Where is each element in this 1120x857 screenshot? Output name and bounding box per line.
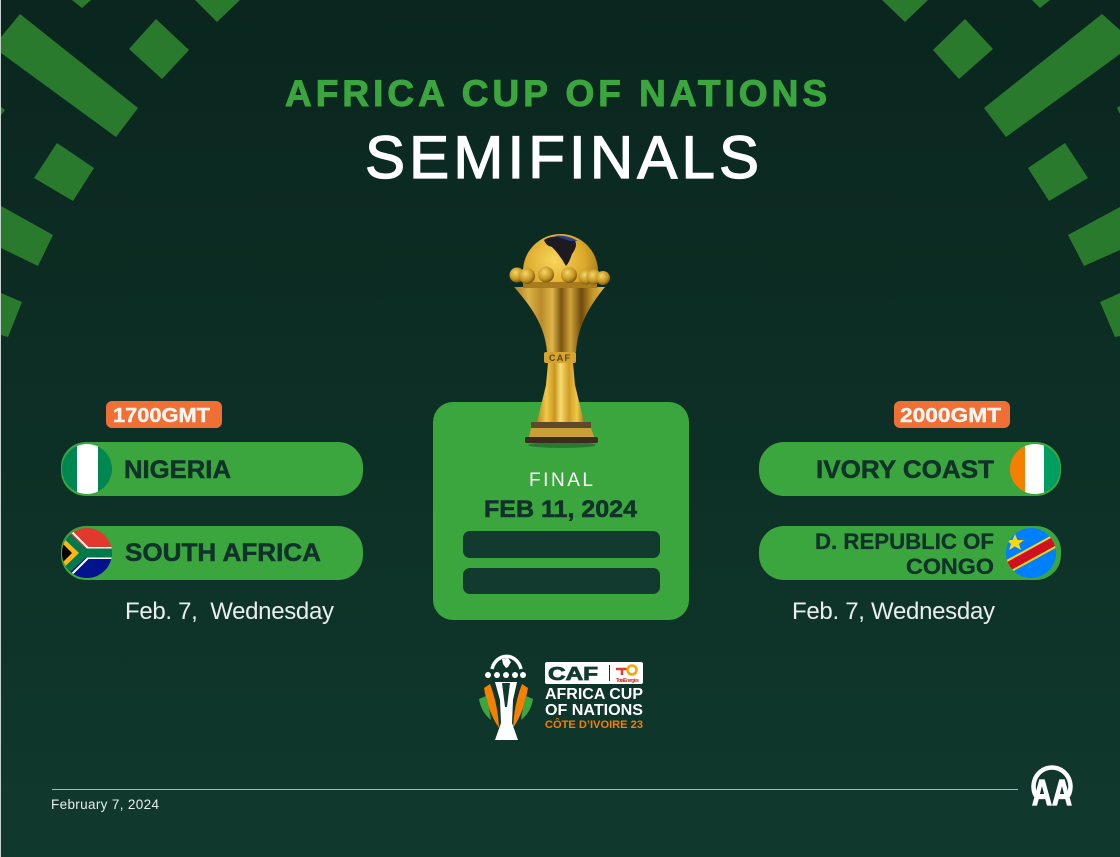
logo: cup emblem (479, 656, 533, 740)
time badge: 2000GMT (894, 401, 1010, 428)
panel: final (433, 402, 689, 620)
time badge: 1700GMT: 1700GMT (113, 405, 210, 427)
logo: CAF badge: TotalEnergies (616, 678, 639, 684)
team row: DR Congo (759, 526, 1061, 580)
match date: left: Feb. 7, Wednesday (125, 598, 334, 625)
finalist slot 1 (463, 531, 660, 558)
icon: trophy (510, 234, 610, 448)
time badge: 2000GMT: 2000GMT (900, 405, 1001, 427)
footer rule (52, 789, 1018, 790)
title (285, 73, 827, 191)
team row: DR Congo: D. REPUBLIC OF (815, 529, 994, 554)
heading: semifinals: SEMIFINALS (365, 124, 759, 191)
icon: trophy: CAF (549, 353, 570, 363)
logo: host line: CÔTE D’IVOIRE 23 (545, 718, 643, 731)
decorative shapes: right (882, 0, 1120, 337)
team row: Nigeria: NIGERIA (124, 456, 231, 484)
team row: South Africa (55, 524, 363, 582)
team row: Ivory Coast: IVORY COAST (816, 456, 994, 484)
team row: DR Congo: CONGO (906, 554, 994, 579)
panel: right semifinal (759, 401, 1064, 625)
decorative shapes: left (1, 0, 240, 337)
finalist slot 2 (463, 568, 660, 594)
heading: tournament name: AFRICA CUP OF NATIONS (285, 73, 827, 114)
icon: Anadolu Agency logo: AA (1032, 772, 1072, 813)
footer date: February 7, 2024 (51, 797, 159, 812)
match date: right: Feb. 7, Wednesday (792, 598, 995, 625)
logo: wordmark: AFRICA CUP (545, 686, 643, 703)
logo: CAF badge: CAF (548, 664, 598, 684)
team row: Ivory Coast (759, 442, 1061, 496)
logo: CAF badge (545, 662, 643, 684)
team row: South Africa: SOUTH AFRICA (125, 539, 321, 567)
team row: Nigeria (61, 442, 363, 496)
time badge: 1700GMT (106, 401, 222, 428)
final date: FEB 11, 2024 (484, 496, 638, 523)
final label: FINAL (529, 470, 593, 491)
logo: wordmark line 2: OF NATIONS (545, 702, 643, 719)
logo: AFCON Cote d'Ivoire 2023 (479, 656, 643, 740)
panel: left semifinal (55, 401, 363, 625)
